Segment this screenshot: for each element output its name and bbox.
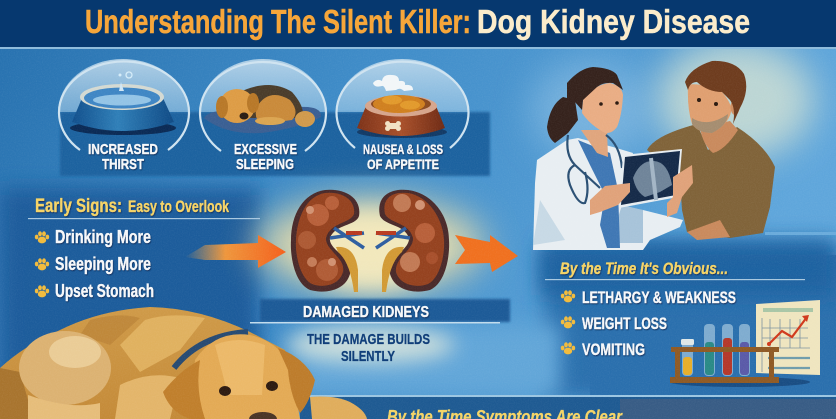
section: by the time it's obvious [545, 259, 805, 359]
icon: water bowl [70, 72, 176, 135]
caption: damage builds silently: THE DAMAGE BUILDS [307, 331, 430, 348]
doctor [533, 67, 683, 250]
chart paper [756, 300, 820, 375]
label: increased thirst [88, 144, 159, 171]
right kidney [376, 190, 449, 292]
kidney glow [255, 197, 485, 363]
list item: drinking more [35, 227, 151, 247]
panel: excessive sleeping [200, 59, 326, 173]
title: Understanding The Silent Killer: [85, 3, 471, 40]
front paw [310, 397, 367, 419]
label: nausea and loss of appetite: NAUSEA & LOSS [363, 141, 443, 157]
arrow: signs to kidneys [185, 235, 286, 268]
tubes [681, 324, 750, 376]
list item: upset stomach [35, 281, 154, 301]
label: nausea and loss of appetite [364, 144, 444, 171]
arrow: kidneys to diagnosis [455, 235, 518, 272]
heading: by the time it's obvious: By the Time It's Obvious... [560, 259, 728, 278]
heading: early signs [35, 196, 229, 217]
scrubs [578, 140, 620, 248]
banner: damaged kidneys: DAMAGED KIDNEYS [303, 304, 429, 321]
face [582, 83, 623, 133]
label: excessive sleeping: SLEEPING [236, 156, 294, 173]
rack [670, 347, 779, 383]
list item: drinking more: Drinking More [55, 227, 151, 247]
panel: nausea and loss of appetite [336, 59, 468, 172]
stethoscope [567, 135, 622, 203]
panel: early symptom band [60, 112, 490, 176]
left kidney [291, 190, 364, 292]
collar [174, 332, 248, 368]
hair [567, 67, 623, 110]
ponytail [547, 97, 578, 143]
eyes [219, 386, 231, 396]
caption: damage builds silently [307, 334, 430, 362]
ears [163, 360, 205, 419]
head [190, 334, 300, 419]
neck [581, 130, 608, 157]
caption: damage builds silently: SILENTLY [341, 348, 395, 365]
body [0, 307, 295, 419]
doctor and owner illustration [533, 61, 775, 250]
list item: weight loss [561, 315, 667, 333]
icon: damaged kidneys [291, 190, 449, 292]
list item: lethargy and weakness [561, 289, 736, 307]
label: excessive sleeping [234, 144, 298, 171]
label: nausea and loss of appetite: OF APPETITE [367, 156, 439, 172]
list item: sleeping more [35, 254, 151, 274]
label: increased thirst: THIRST [102, 156, 144, 173]
owner [647, 61, 775, 240]
icon: sleeping dog on cushion [204, 85, 321, 133]
illustration: resting golden retriever [0, 307, 367, 419]
list item: upset stomach: Upset Stomach [55, 281, 154, 301]
coat [533, 138, 683, 250]
panel: increased thirst [58, 59, 189, 173]
list item: lethargy and weakness: LETHARGY & WEAKNESS [582, 289, 736, 307]
bottom band [300, 395, 836, 419]
banner: damaged kidneys [250, 299, 510, 324]
nose [249, 412, 277, 419]
list item: vomiting [561, 341, 645, 359]
header band [0, 0, 836, 47]
heading: early signs: Easy to Overlook [128, 197, 229, 216]
list item: vomiting: VOMITING [582, 341, 645, 359]
title: Dog Kidney Disease [477, 3, 750, 40]
icon: test tubes and chart [670, 300, 820, 387]
icon: food bowl [357, 75, 447, 138]
section: early signs [28, 196, 260, 301]
list item: weight loss: WEIGHT LOSS [582, 315, 667, 333]
title [86, 8, 750, 40]
heading: early signs: Early Signs: [35, 196, 122, 217]
label: increased thirst: INCREASED [88, 141, 158, 158]
x-ray [619, 149, 682, 208]
haunch [19, 331, 111, 405]
list item: sleeping more: Sleeping More [55, 254, 151, 274]
label: excessive sleeping: EXCESSIVE [234, 141, 297, 158]
doctor hands [590, 165, 693, 217]
